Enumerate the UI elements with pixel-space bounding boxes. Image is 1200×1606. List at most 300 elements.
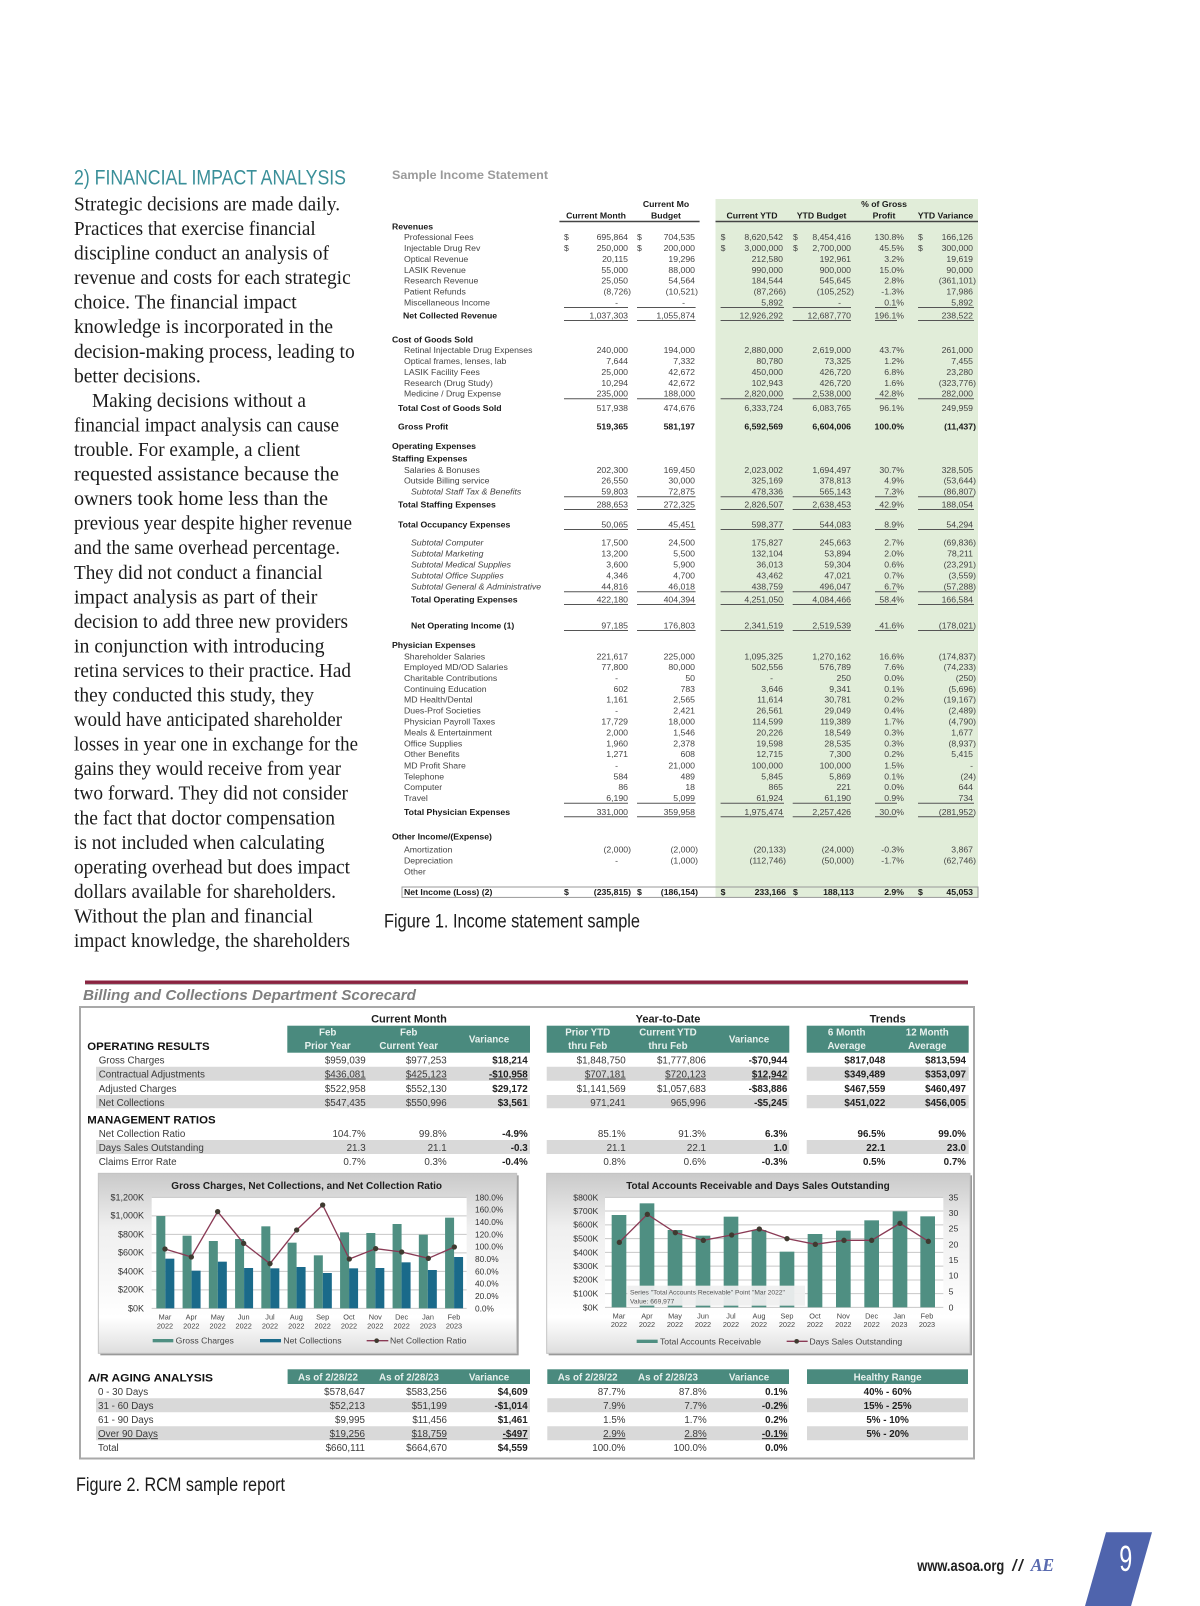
text block: article body: impact analysis as part of their [74, 586, 318, 608]
section: revenues: 19,296 [668, 254, 695, 264]
table: A/R aging analysis: 61 - 90 Days [98, 1415, 154, 1426]
section: revenues: 19,619 [946, 254, 973, 264]
section: cost of goods sold: 23,280 [946, 367, 973, 377]
section: physician expenses: 602 [614, 684, 628, 694]
section: revenues: 5,892 [951, 298, 973, 308]
table: A/R aging analysis: 100.0% [592, 1443, 626, 1454]
table: management ratios: 99.0% [938, 1129, 966, 1140]
section: physician expenses: 0.1% [884, 684, 904, 694]
section: operating expenses: Staffing Expenses [392, 454, 467, 464]
section: cost of goods sold: 80,780 [756, 356, 783, 366]
table: management ratios: 104.7% [332, 1129, 366, 1140]
section: physician expenses: 61,924 [756, 793, 783, 803]
table: operating results: $550,996 [406, 1098, 447, 1109]
table: A/R aging analysis: 7.7% [684, 1401, 707, 1412]
section: revenues: (105,252) [817, 287, 854, 297]
section: physician expenses: 19,598 [756, 738, 783, 748]
table: management ratios: 0.3% [424, 1157, 447, 1168]
section: cost of goods sold: 6,083,765 [812, 403, 851, 413]
x axis labels: Feb [921, 1311, 933, 1320]
chart: gross charges, net collections and net collection ratio: 20.0% [475, 1291, 499, 1301]
chart: total accounts receivable and days sales outstanding: Total Accounts Receivable and Days Sales Outstanding [626, 1181, 890, 1192]
section: operating expenses: 2.0% [884, 549, 904, 559]
x axis labels: 2022 [751, 1320, 767, 1329]
section: revenues: 130.8% [875, 232, 904, 242]
y axis labels: $400K [573, 1247, 599, 1257]
section: physician expenses: 30.0% [879, 807, 904, 817]
section: operating expenses: 544,083 [820, 519, 851, 529]
table: management ratios: 85.1% [598, 1129, 626, 1140]
table: A/R aging analysis: As of 2/28/23 [379, 1372, 439, 1384]
section: cost of goods sold: 2,880,000 [744, 345, 783, 355]
table: management ratios: -0.3% [762, 1157, 788, 1168]
section: cost of goods sold: Cost of Goods Sold [392, 334, 473, 344]
x axis labels: Jan [893, 1311, 905, 1320]
group headers: Trends [870, 1014, 906, 1026]
section: physician expenses: 0.4% [884, 706, 904, 716]
section: revenues: (87,266) [754, 287, 786, 297]
legend: Gross Charges [176, 1336, 235, 1346]
section: cost of goods sold: 102,943 [752, 378, 783, 388]
section: other income [392, 832, 976, 876]
section: operating expenses: 5,900 [673, 560, 695, 570]
section: cost of goods sold: Gross Profit [398, 422, 448, 432]
section: physician expenses: (74,233) [944, 662, 976, 672]
text block: article body: owners took home less than the [74, 488, 328, 510]
y axis labels: $500K [573, 1234, 599, 1244]
y axis labels: $200K [118, 1285, 144, 1295]
group headers: Prior YTD [565, 1028, 610, 1038]
table: management ratios: 22.1 [866, 1143, 886, 1154]
section: physician expenses: 1,975,474 [744, 807, 783, 817]
text block: article body: Practices that exercise financial [74, 218, 316, 240]
section: operating expenses: 438,759 [752, 581, 783, 591]
table: A/R aging analysis: -$1,014 [494, 1401, 528, 1412]
section: physician expenses: (250) [956, 673, 976, 683]
table: A/R aging analysis: 0.1% [765, 1387, 788, 1398]
section: operating expenses: 0.6% [884, 560, 904, 570]
section: operating expenses: 17,500 [601, 538, 628, 548]
section: revenues: (361,101) [939, 276, 976, 286]
table: A/R aging analysis: Total [98, 1443, 119, 1454]
section: cost of goods sold: 7,644 [606, 356, 628, 366]
section: other income: - [615, 855, 618, 865]
table: operating results: $1,057,683 [657, 1084, 707, 1095]
section: revenues: 1,055,874 [656, 310, 695, 320]
table: A/R aging analysis: -0.1% [762, 1429, 788, 1440]
section: physician expenses: 576,789 [820, 662, 851, 672]
table: A/R aging analysis: $1,461 [498, 1415, 528, 1426]
section: operating expenses: 0.7% [884, 571, 904, 581]
section: physician expenses: MD Profit Share [404, 760, 466, 770]
section: physician expenses [392, 640, 976, 817]
section: revenues: $ [721, 232, 726, 242]
group headers: Prior Year [305, 1041, 351, 1052]
section: physician expenses: 1.7% [884, 717, 904, 727]
footer: website and logo: // [1012, 1556, 1025, 1575]
section: physician expenses: 0.3% [884, 728, 904, 738]
section: operating expenses: 478,336 [752, 486, 783, 496]
x axis labels: 2022 [288, 1321, 304, 1330]
section: physician expenses: (8,937) [948, 738, 976, 748]
section: operating expenses: (23,291) [944, 560, 976, 570]
x axis labels: May [211, 1313, 225, 1322]
table: A/R aging analysis: A/R AGING ANALYSIS [88, 1372, 213, 1384]
table header: YTD Variance [918, 210, 973, 220]
section: physician expenses: - [770, 673, 773, 683]
y axis labels: $600K [573, 1220, 599, 1230]
section: operating expenses: 59,304 [824, 560, 851, 570]
chart: total accounts receivable and days sales outstanding: 35 [949, 1192, 958, 1202]
group headers: Current Year [379, 1041, 438, 1052]
table: A/R aging analysis [88, 1369, 968, 1454]
text block: article body: operating overhead but does impact [74, 856, 350, 878]
section: operating expenses: Total Operating Expenses [411, 595, 518, 605]
section: physician expenses: 250 [836, 673, 851, 683]
section: revenues: 5,892 [761, 298, 783, 308]
table: operating results: $977,253 [406, 1056, 447, 1066]
section: operating expenses: (57,288) [944, 581, 976, 591]
section: revenues [392, 221, 976, 320]
row: net income: 2.9% [884, 887, 904, 897]
section: physician expenses: 11,614 [757, 695, 783, 705]
group headers: Average [828, 1041, 866, 1052]
footer: website and logo: www.asoa.org [916, 1558, 1004, 1575]
text block: article body [74, 194, 358, 952]
section: revenues: $ [637, 232, 642, 242]
section: operating expenses: (178,021) [939, 620, 976, 630]
section: cost of goods sold: 7,332 [673, 356, 695, 366]
table: operating results: $1,848,750 [577, 1056, 626, 1066]
x axis labels: 2022 [611, 1320, 627, 1329]
chart: total accounts receivable and days sales outstanding: 5 [949, 1286, 954, 1296]
section: other income: -0.3% [881, 845, 904, 855]
chart: total accounts receivable and days sales outstanding [547, 1173, 972, 1355]
table: A/R aging analysis: $4,609 [498, 1387, 528, 1398]
table: A/R aging analysis: $578,647 [324, 1387, 365, 1398]
section: operating expenses: (3,559) [948, 571, 976, 581]
footer: website and logo: AE [1030, 1555, 1054, 1575]
section: operating expenses: (53,644) [944, 476, 976, 486]
table: management ratios: 21.3 [347, 1143, 366, 1154]
text block: article body: Without the plan and financial [74, 906, 313, 928]
section: operating expenses: 42.9% [879, 499, 904, 509]
section: cost of goods sold: 235,000 [597, 389, 628, 399]
row: net income: $ [637, 887, 642, 897]
section: cost of goods sold: 426,720 [820, 378, 851, 388]
section: physician expenses: Shareholder Salaries [404, 651, 486, 661]
chart: gross charges, net collections and net collection ratio: 0.0% [475, 1303, 495, 1313]
chart: gross charges, net collections and net collection ratio: 100.0% [475, 1242, 504, 1252]
table: A/R aging analysis: 100.0% [673, 1443, 707, 1454]
section: revenues: 2.8% [884, 276, 904, 286]
heading: financial impact analysis: 2) FINANCIAL IMPACT ANALYSIS [74, 166, 346, 190]
section: revenues: 88,000 [668, 265, 695, 275]
section: operating expenses: Total Staffing Expenses [398, 499, 496, 509]
chart: gross charges, net collections and net collection ratio: 140.0% [475, 1217, 504, 1227]
bars: net collections [165, 1257, 463, 1308]
section: revenues: Injectable Drug Rev [404, 243, 481, 253]
section: physician expenses: Travel [404, 793, 428, 803]
group headers: 6 Month [828, 1028, 865, 1038]
table: A/R aging analysis: $11,456 [412, 1415, 448, 1426]
x axis labels: Dec [395, 1313, 409, 1322]
table: operating results: $425,123 [406, 1070, 447, 1080]
section: revenues: (8,726) [603, 287, 631, 297]
section: operating expenses: 2,638,453 [812, 499, 851, 509]
x axis labels: Oct [343, 1313, 355, 1322]
section: physician expenses: 225,000 [664, 651, 695, 661]
section: operating expenses: 2.7% [884, 538, 904, 548]
table: management ratios: 99.8% [419, 1129, 447, 1140]
section: revenues: Miscellaneous Income [404, 298, 490, 308]
y axis labels: $700K [573, 1206, 599, 1216]
chart: gross charges, net collections and net collection ratio: 40.0% [475, 1279, 499, 1289]
group headers: Feb [319, 1028, 336, 1038]
text block: article body: financial impact analysis can cause [74, 414, 339, 436]
section: physician expenses: 1.5% [884, 760, 904, 770]
x axis labels: 2022 [667, 1320, 683, 1329]
section: cost of goods sold: 194,000 [664, 345, 695, 355]
section: revenues: $ [918, 243, 923, 253]
section: physician expenses: 1,161 [606, 695, 628, 705]
table: A/R aging analysis: 1.5% [603, 1415, 626, 1426]
section: physician expenses: 221,617 [597, 651, 628, 661]
row: net income [402, 887, 978, 897]
section: physician expenses: 16.6% [879, 651, 904, 661]
section: revenues: 8,620,542 [744, 232, 783, 242]
section: revenues: 900,000 [820, 265, 851, 275]
table: A/R aging analysis: 40% - 60% [864, 1387, 912, 1398]
table: operating results: $349,489 [844, 1070, 886, 1080]
x axis labels: Aug [290, 1313, 303, 1322]
chart: gross charges, net collections and net collection ratio: Gross Charges, Net Collections, and Net Collection Ratio [171, 1181, 442, 1192]
section: cost of goods sold: 6,592,569 [744, 422, 783, 432]
section: cost of goods sold: LASIK Facility Fees [404, 367, 480, 377]
line: days sales outstanding [617, 1212, 931, 1247]
section: operating expenses: 6.7% [884, 581, 904, 591]
section: physician expenses: 1,271 [606, 749, 628, 759]
section: physician expenses: Continuing Education [404, 684, 487, 694]
x axis labels: Dec [865, 1311, 879, 1320]
text block: article body: requested assistance because the [74, 464, 339, 486]
section: revenues: $ [793, 243, 798, 253]
chart: total accounts receivable and days sales outstanding: 25 [949, 1224, 958, 1234]
y axis labels: $800K [573, 1192, 599, 1202]
x axis labels: 2022 [236, 1321, 252, 1330]
text block: article body: losses in year one in exchange for the [74, 734, 358, 756]
table: operating results: $460,497 [925, 1084, 967, 1095]
table: management ratios [87, 1114, 969, 1168]
section: physician expenses: Physician Expenses [392, 640, 476, 650]
section: physician expenses: 0.1% [884, 771, 904, 781]
section: physician expenses: 865 [768, 782, 783, 792]
section: physician expenses: 1,546 [673, 728, 695, 738]
section: physician expenses: 1,960 [606, 738, 628, 748]
table: management ratios: 1.0 [774, 1143, 788, 1154]
section: physician expenses: 119,389 [820, 717, 851, 727]
x axis labels: Jul [265, 1313, 275, 1322]
table: A/R aging analysis: Variance [469, 1372, 510, 1384]
table: operating results: $467,559 [844, 1084, 886, 1095]
text block: article body: would have anticipated shareholder [74, 709, 342, 731]
table: A/R aging analysis: 0 - 30 Days [98, 1387, 148, 1398]
section: cost of goods sold: 6,604,006 [812, 422, 851, 432]
group headers: Average [908, 1041, 947, 1052]
x axis labels: 2023 [919, 1320, 935, 1329]
table: management ratios: 96.5% [858, 1129, 886, 1140]
section: physician expenses: 2,378 [673, 738, 695, 748]
section: operating expenses: 45,451 [668, 519, 695, 529]
section: other income: (1,000) [670, 855, 698, 865]
section: physician expenses: 114,599 [752, 717, 783, 727]
section: cost of goods sold: 2,820,000 [744, 389, 783, 399]
section: cost of goods sold: 519,365 [597, 422, 628, 432]
text block: article body: revenue and costs for each strategic [74, 267, 351, 289]
table: management ratios: 91.3% [678, 1129, 706, 1140]
section: cost of goods sold: (11,437) [944, 422, 976, 432]
section: revenues: $ [564, 232, 569, 242]
table: A/R aging analysis: $583,256 [406, 1387, 448, 1398]
table header: Current Month [566, 210, 626, 220]
section: revenues: 8,454,416 [812, 232, 851, 242]
table: management ratios: 0.6% [684, 1157, 706, 1168]
table: operating results: 971,241 [590, 1098, 626, 1109]
section: operating expenses: 2,341,519 [744, 620, 783, 630]
table: operating results: $813,594 [925, 1056, 967, 1066]
section: operating expenses: 245,663 [820, 538, 851, 548]
section: other income: -1.7% [881, 855, 904, 865]
section: cost of goods sold: 6.8% [884, 367, 904, 377]
section: physician expenses: 9,341 [829, 684, 851, 694]
text block: article body: trouble. For example, a client [74, 439, 300, 461]
table: management ratios: -0.3 [511, 1143, 528, 1154]
section: revenues: Patient Refunds [404, 287, 466, 297]
section: physician expenses: 0.3% [884, 738, 904, 748]
x axis labels: 2023 [420, 1321, 436, 1330]
table: operating results: $522,958 [325, 1084, 366, 1095]
section: cost of goods sold: 240,000 [597, 345, 628, 355]
caption: figure 1: Figure 1. Income statement sample [384, 912, 640, 932]
section: physician expenses: 86 [618, 782, 628, 792]
row: net income: 233,166 [755, 887, 786, 897]
group headers: 12 Month [906, 1028, 949, 1038]
section: revenues: 212,580 [752, 254, 783, 264]
section: physician expenses: 80,000 [668, 662, 695, 672]
section: operating expenses: 166,584 [942, 595, 973, 605]
section: physician expenses: 61,190 [824, 793, 851, 803]
table: A/R aging analysis: -0.2% [762, 1401, 788, 1412]
table: A/R aging analysis: 2.9% [603, 1429, 626, 1440]
page number tab [1085, 1532, 1152, 1606]
section: physician expenses: (174,837) [939, 651, 976, 661]
x axis labels: 2022 [864, 1320, 880, 1329]
table: operating results: $817,048 [844, 1056, 886, 1066]
table header: Current Mo [643, 199, 689, 209]
section: physician expenses: 489 [680, 771, 695, 781]
section: revenues: (10,521) [666, 287, 698, 297]
section: revenues: 12,687,770 [808, 310, 851, 320]
line: net collection ratio [162, 1202, 457, 1266]
section: operating expenses: 26,550 [601, 476, 628, 486]
table: operating results: $959,039 [325, 1056, 366, 1066]
row: net income: 45,053 [946, 887, 973, 897]
section: operating expenses: 13,200 [601, 549, 628, 559]
panel: sample income statement: Sample Income Statement [392, 168, 548, 182]
row: net income: $ [918, 887, 923, 897]
section: physician expenses: 0.0% [884, 782, 904, 792]
x axis labels: Feb [448, 1313, 460, 1322]
section: physician expenses: 50 [685, 673, 695, 683]
section: operating expenses: 30.7% [879, 465, 904, 475]
table: operating results: $451,022 [844, 1098, 886, 1109]
section: cost of goods sold: 517,938 [597, 403, 628, 413]
section: physician expenses: 2,000 [606, 728, 628, 738]
table: A/R aging analysis: $51,199 [412, 1401, 447, 1412]
section: operating expenses: 328,505 [942, 465, 973, 475]
table: operating results: $552,130 [406, 1084, 447, 1095]
section: operating expenses: 176,803 [664, 620, 695, 630]
section: physician expenses: (19,167) [944, 695, 976, 705]
section: revenues: 184,544 [752, 276, 783, 286]
table: operating results: -$83,886 [749, 1084, 788, 1095]
section: physician expenses: 1,677 [951, 728, 973, 738]
section: operating expenses [392, 441, 976, 630]
section: cost of goods sold: 450,000 [752, 367, 783, 377]
section: physician expenses: 21,000 [668, 760, 695, 770]
section: other income: (24,000) [822, 845, 854, 855]
section: cost of goods sold: 42,672 [668, 378, 695, 388]
table: management ratios: 23.0 [947, 1143, 967, 1154]
row: net income: $ [721, 887, 726, 897]
section: operating expenses: 272,325 [664, 499, 695, 509]
group headers [287, 1014, 969, 1053]
section: operating expenses: 72,875 [668, 486, 695, 496]
table: management ratios: 22.1 [687, 1143, 706, 1154]
x axis labels: 2022 [807, 1320, 823, 1329]
section: operating expenses: 404,394 [664, 595, 695, 605]
section: operating expenses: 3,600 [606, 560, 628, 570]
section: operating expenses: 41.6% [879, 620, 904, 630]
section: other income: (2,000) [670, 845, 698, 855]
tooltip [627, 1286, 805, 1306]
section: cost of goods sold: 42.8% [879, 389, 904, 399]
x axis labels: May [668, 1311, 682, 1320]
section: physician expenses: 0.2% [884, 695, 904, 705]
group headers: thru Feb [648, 1041, 688, 1052]
section: physician expenses: (4,790) [948, 717, 976, 727]
table: management ratios: Claims Error Rate [99, 1157, 177, 1168]
row: net income: (186,154) [661, 887, 698, 897]
section: cost of goods sold [392, 334, 976, 432]
section: revenues: - [838, 298, 841, 308]
section: operating expenses: 36,013 [756, 560, 783, 570]
x axis labels: 2022 [835, 1320, 851, 1329]
table: management ratios: 21.1 [607, 1143, 626, 1154]
section: physician expenses: 29,049 [824, 706, 851, 716]
section: other income: (50,000) [822, 855, 854, 865]
table: operating results: $353,097 [925, 1070, 967, 1080]
section: operating expenses: Outside Billing service [404, 476, 490, 486]
panel: sample income statement [392, 168, 978, 897]
table header: Profit [873, 210, 895, 220]
y axis labels: $100K [573, 1289, 599, 1299]
section: revenues: 12,926,292 [740, 310, 783, 320]
group headers: Current Month [371, 1014, 447, 1026]
section: revenues: 3.2% [884, 254, 904, 264]
table: management ratios: 6.3% [765, 1129, 788, 1140]
x axis labels: Sep [316, 1313, 329, 1322]
